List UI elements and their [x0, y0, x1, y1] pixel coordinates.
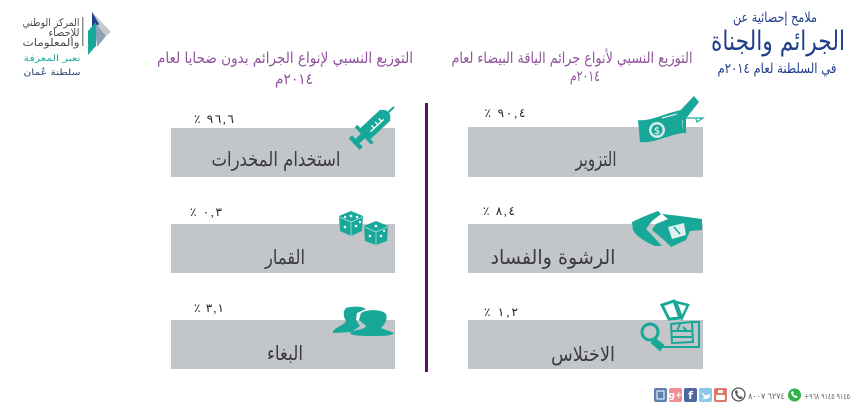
icon: two figures	[333, 307, 394, 336]
logo mark	[82, 12, 111, 55]
logo name text: المركز الوطني	[22, 17, 80, 29]
icon: instagram	[654, 388, 667, 402]
value: embezzlement: ١,٢ ٪	[484, 305, 518, 319]
icon: whatsapp	[788, 388, 801, 402]
heading: left column	[157, 49, 413, 88]
title: first line: ملامح إحصائية عن	[733, 10, 817, 26]
panel: embezzlement	[468, 301, 703, 369]
heading: left column: ٢٠١٤م	[275, 70, 313, 88]
panel: drug use	[171, 98, 402, 177]
panel: prostitution	[171, 301, 395, 369]
footer contact bar	[654, 388, 850, 402]
heading: right column	[452, 48, 692, 85]
logo	[22, 12, 111, 78]
label: gambling: القمار	[264, 245, 305, 269]
icon: phone	[732, 388, 745, 401]
social icons	[654, 388, 727, 402]
icon: twitter	[699, 388, 712, 402]
logo tagline: نعبر المعرفة	[24, 54, 80, 64]
icon: banknote and pen: $	[654, 126, 660, 137]
column divider	[425, 103, 428, 372]
value: drug use: ٩٦,٦ ٪	[194, 112, 234, 126]
logo name text: والمعلومات	[22, 37, 80, 49]
logo name text	[22, 17, 80, 49]
logo country name: سلطنة عُمان	[24, 67, 80, 78]
label: drug use: استخدام المخدرات	[212, 147, 340, 171]
value: forgery: ٩٠,٤ ٪	[484, 106, 526, 120]
value: prostitution: ٣,١ ٪	[194, 301, 224, 315]
title: third line: في السلطنة لعام ٢٠١٤م	[718, 61, 836, 77]
value: gambling: ٠,٣ ٪	[190, 205, 223, 219]
whatsapp number: +٩٦٨ ٩١٤٥ ٩١٤٥	[804, 392, 850, 401]
panel: gambling	[171, 205, 395, 273]
icon: facebook: f	[688, 389, 693, 402]
heading: right column: التوزيع النسبي لأنواع جرائم الياقة البيضاء لعام	[452, 48, 692, 68]
label: embezzlement: الاختلاس	[551, 342, 615, 366]
icon: banknote and pen	[638, 96, 703, 142]
icon: youtube	[714, 388, 727, 402]
label: forgery: التزوير	[575, 147, 616, 171]
heading: left column: التوزيع النسبي لإنواع الجرائم بدون ضحايا لعام	[157, 49, 413, 68]
value: bribery: ٨,٤ ٪	[483, 204, 515, 218]
panel: forgery	[468, 96, 703, 177]
phone number: ٦٢٧٤ ٨٠٠٧	[748, 392, 785, 402]
icon: handshake with money	[632, 211, 702, 247]
icon: google plus: g+	[669, 391, 682, 401]
title block	[711, 10, 845, 77]
icon: dice	[339, 211, 388, 245]
logo name text: للإحصاء	[48, 27, 80, 39]
icon: syringe	[346, 98, 402, 153]
heading: right column: ٢٠١٤م	[570, 67, 600, 85]
label: bribery: الرشوة والفساد	[490, 245, 616, 269]
panel: bribery and corruption	[468, 204, 703, 273]
label: prostitution: البغاء	[267, 341, 303, 365]
icon: handcuffed hand and money	[642, 301, 699, 350]
